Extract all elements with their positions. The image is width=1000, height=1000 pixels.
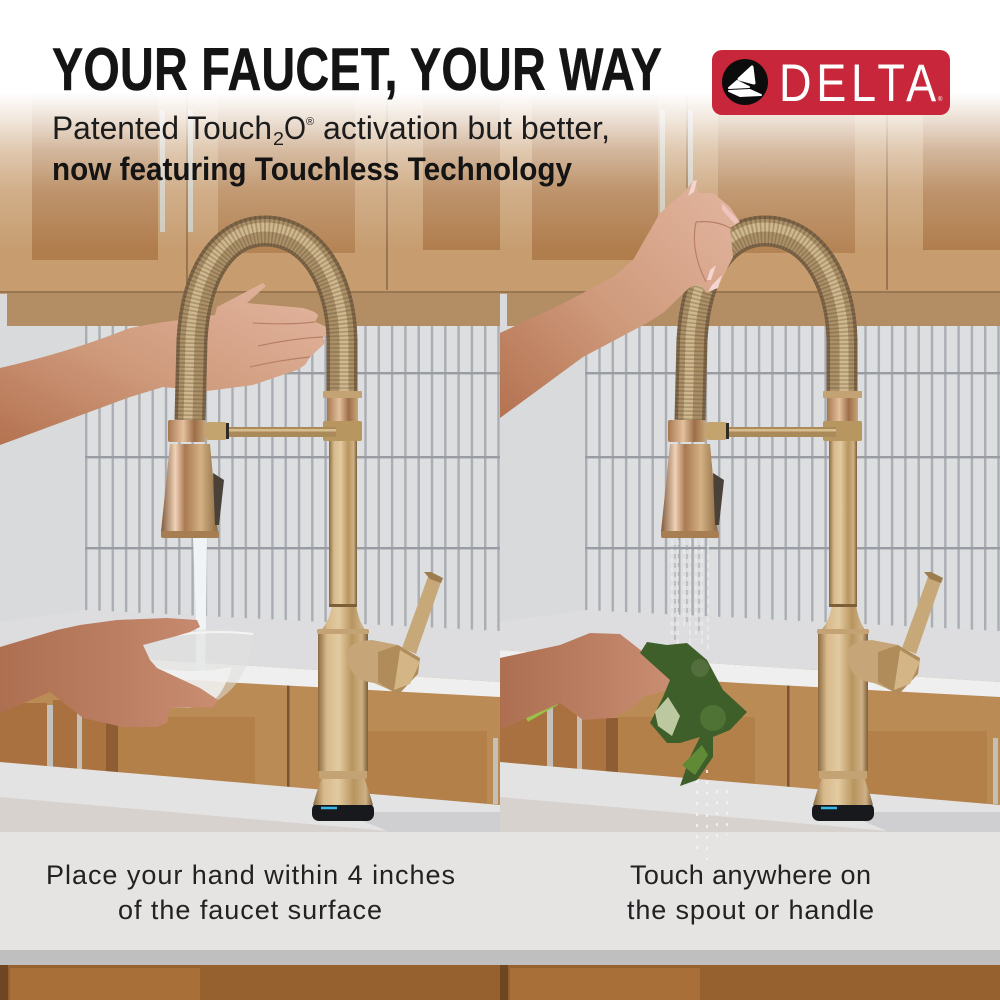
- caption left: of the faucet surface: [118, 895, 382, 925]
- subtitle line one: Patented Touch: [52, 110, 272, 146]
- logo: Delta: [712, 50, 950, 115]
- right hand holding herbs: [500, 633, 670, 730]
- herb bunch: [640, 642, 747, 786]
- caption right: Touch anywhere on: [630, 860, 871, 890]
- left scene background: [0, 0, 500, 1000]
- right arm and pinching hand: [500, 179, 740, 418]
- logo: Delta: ®: [938, 96, 943, 103]
- subtitle line one: activation but better,: [323, 110, 610, 146]
- left water stream: [193, 538, 207, 672]
- caption left: Place your hand within 4 inches: [46, 860, 455, 890]
- right faucet: [661, 227, 943, 821]
- logo: Delta: DELTA: [779, 54, 936, 113]
- glass bowl with water: [143, 629, 253, 708]
- subtitle line one: O: [284, 110, 306, 146]
- subtitle line one: [52, 110, 610, 149]
- caption left: [46, 860, 455, 925]
- left arm and open hand behind spout: [0, 283, 328, 445]
- subtitle line one: ®: [306, 116, 314, 128]
- right scene background: [500, 0, 1000, 1000]
- left hand holding bowl: [0, 618, 218, 727]
- water droplets spray: [672, 540, 727, 860]
- caption right: [627, 860, 874, 925]
- subtitle line two: now featuring Touchless Technology: [52, 151, 572, 187]
- white fade at top: [0, 0, 1000, 250]
- left faucet: [161, 227, 443, 821]
- title: YOUR FAUCET, YOUR WAY: [52, 36, 662, 103]
- subtitle line one: 2: [273, 129, 284, 149]
- caption right: the spout or handle: [627, 895, 874, 925]
